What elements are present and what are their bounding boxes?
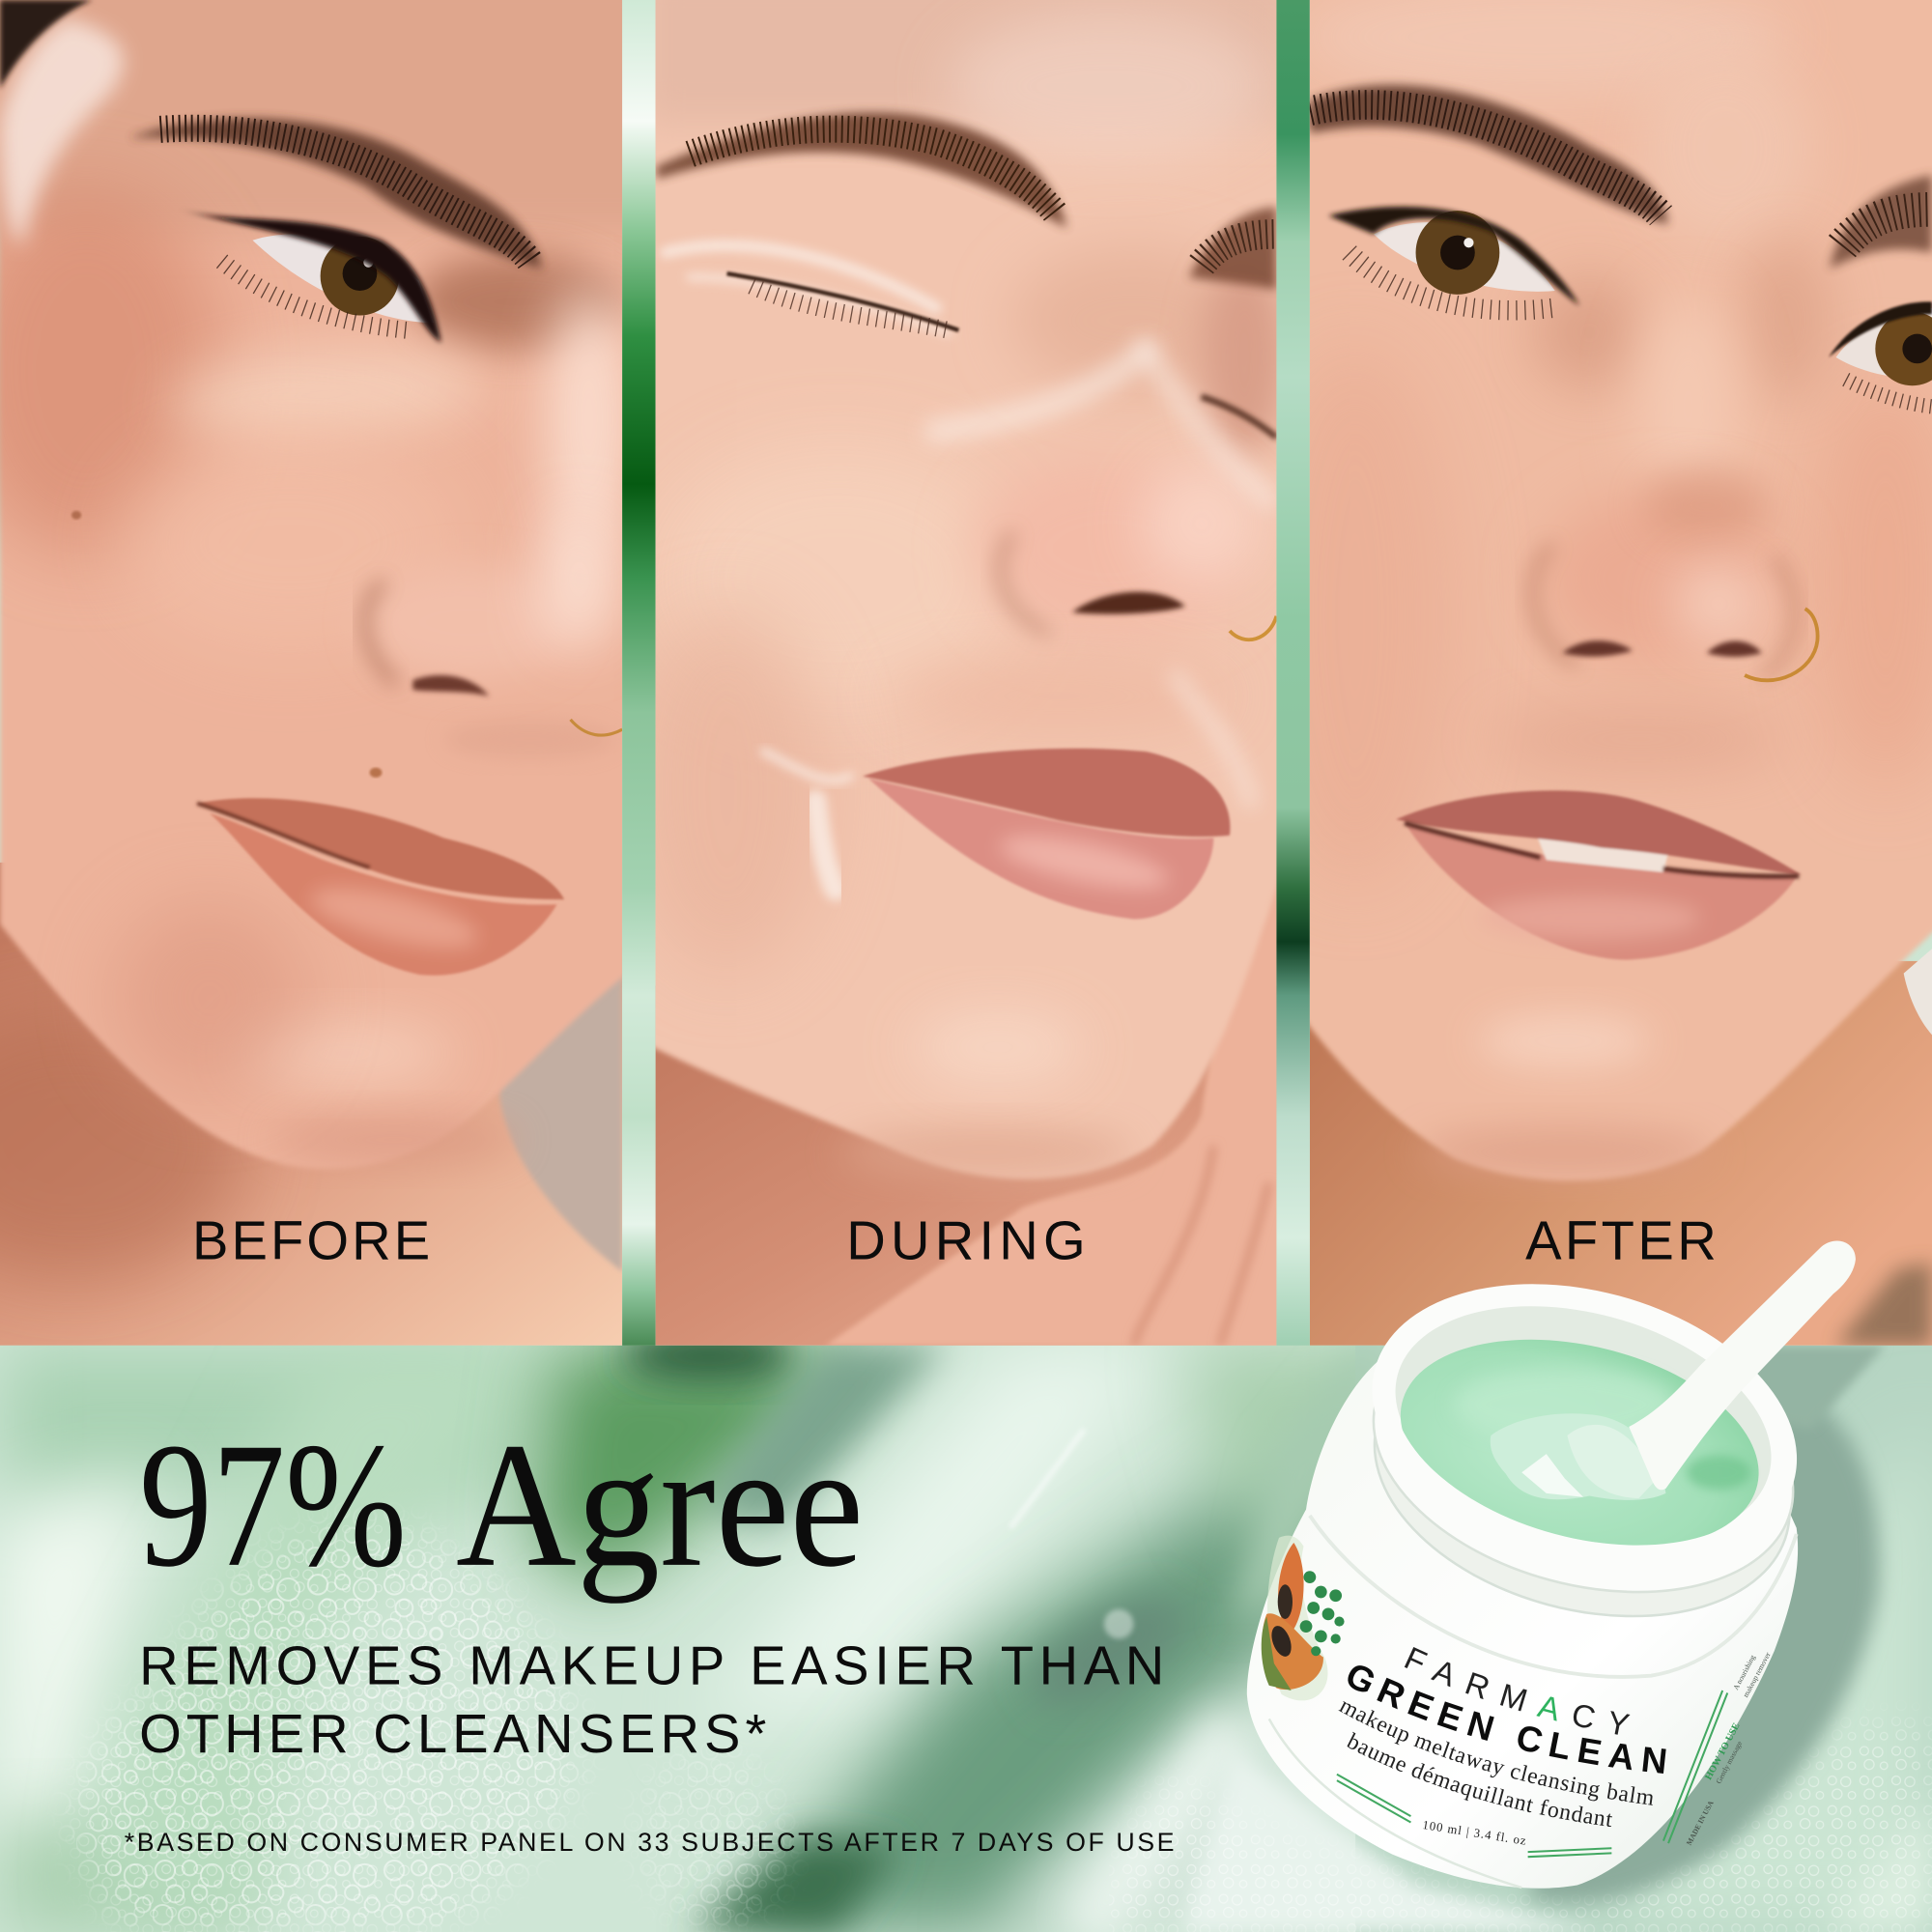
claim text: OTHER CLEANSERS* [139,1703,766,1764]
side panel text: HOW TO USE [1703,1721,1743,1782]
soap drop [1104,1609,1133,1638]
spatula [1629,1240,1856,1490]
icon: nostril [412,675,489,696]
footnote: *BASED ON CONSUMER PANEL ON 33 SUBJECTS AFTER 7 DAYS OF USE [125,1828,1175,1857]
icon: lips [197,798,564,976]
product descriptor: makeup meltaway cleansing balm [1339,1701,1653,1805]
panel: bottom background [0,1331,1932,1932]
jar neck threads [1343,1277,1824,1660]
icon: right brow [1830,175,1932,269]
panel: during [629,0,1293,1346]
icon: eye [179,210,441,343]
icon: closed eye [727,273,1276,438]
side panel text [1685,1650,1773,1847]
icon: left eye [1328,207,1579,310]
foam bubbles left [0,1346,863,1932]
green balm [1379,1307,1779,1581]
jar body [1247,1361,1798,1889]
label: during: DURING [846,1210,1086,1271]
icon: right eye [1829,301,1932,407]
icon: lips [1396,790,1802,960]
side panel text: A nourishing [1731,1654,1757,1691]
icon: nose ring [1230,616,1276,639]
side panel text: Gently massage [1714,1739,1744,1785]
balm scoop lumps [1491,1413,1665,1500]
green rules [1337,1690,1727,1857]
foam bubbles right [1109,1346,1932,1932]
product jar [1246,1240,1856,1889]
icon: left brow [1310,85,1668,224]
strip: green divider left [622,0,656,1346]
claim text [139,1635,1164,1764]
side panel text: makeup remover [1741,1650,1773,1699]
title: 97% Agree: Agree [456,1406,864,1605]
jar rim [1341,1239,1829,1609]
side panel text: MADE IN USA [1685,1799,1716,1847]
hair [0,0,93,89]
foam smears [666,245,1269,890]
icon: lips [863,749,1230,920]
spatula shadow on skin [1836,1263,1932,1346]
title: 97% Agree: 97% [139,1406,407,1605]
jar inner wall [1369,1267,1798,1581]
claim text: REMOVES MAKEUP EASIER THAN [139,1635,1164,1696]
label: before: BEFORE [192,1210,430,1271]
icon: nose ring [571,720,622,735]
title: 97% Agree [139,1406,864,1605]
product size: 100 ml | 3.4 fl. oz [1421,1818,1528,1848]
label: after: AFTER [1525,1210,1717,1271]
product descriptor french: baume démaquillant fondant [1347,1731,1612,1827]
panel: before [0,0,666,1346]
jar shadow [1528,1368,1880,1903]
face: after [1257,0,1932,1180]
strip: green divider right [1276,0,1310,1346]
icon: left brow [657,112,1067,228]
panel: after [1257,0,1932,1346]
icon: brow [129,118,542,269]
face: before [0,0,666,1169]
brand name: Farmacy: FARMACY [1405,1647,1631,1735]
face: during [629,0,1293,1179]
hand [826,850,1282,1346]
icon: nostril [1072,592,1185,614]
icon: nostrils [1562,640,1762,657]
papaya illustration [1262,1536,1345,1700]
product name: Green Clean: GREEN CLEAN [1348,1665,1666,1774]
icon: right brow [1189,207,1276,290]
icon: nose ring [1745,609,1818,680]
